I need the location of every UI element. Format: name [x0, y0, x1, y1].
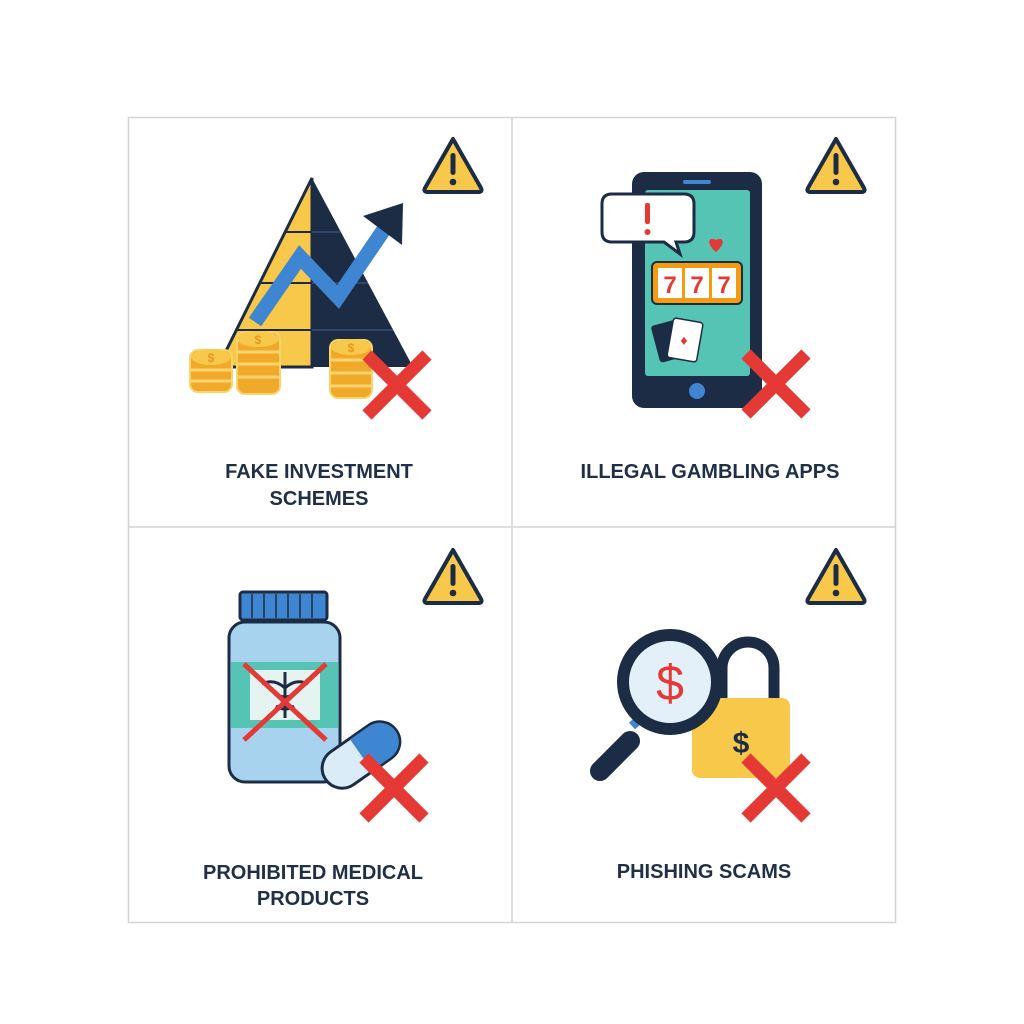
icon: coins: $: [348, 341, 355, 355]
icon: red x: [746, 354, 806, 414]
icon: padlock: $: [733, 727, 750, 760]
icon: red x: [364, 758, 424, 818]
icon: magnifier: [600, 635, 717, 771]
icon: pill: [314, 714, 408, 796]
icon: speech bubble: [602, 194, 694, 254]
icon: warning: [807, 550, 865, 603]
heading: PHISHING SCAMS: [617, 861, 791, 883]
icon: phone: 7: [717, 272, 731, 299]
icon: phone: 7: [663, 272, 677, 299]
icon: bottle: [229, 592, 340, 782]
panel: prohibited medical products: [203, 550, 482, 910]
panel: fake investment schemes: [190, 139, 482, 510]
grid frame: [128, 117, 896, 922]
panel: phishing scams: [600, 550, 865, 883]
heading: PROHIBITED MEDICAL: [203, 862, 423, 884]
heading: FAKE INVESTMENT: [225, 461, 413, 483]
heading: PRODUCTS: [257, 888, 369, 910]
icon: warning: [424, 550, 482, 603]
icon: coins: [190, 331, 372, 398]
icon: warning: [807, 139, 865, 192]
icon: red x: [367, 355, 427, 415]
icon: warning: [424, 139, 482, 192]
icon: phone: 7: [690, 272, 704, 299]
icon: phone: ♦: [680, 332, 688, 348]
icon: magnifier: $: [656, 655, 684, 711]
icon: rising arrow: [255, 203, 403, 322]
icon: coins: $: [255, 333, 262, 347]
icon: phone: [632, 172, 762, 408]
panel: illegal gambling apps: [581, 139, 865, 483]
icon: padlock: [692, 642, 790, 778]
icon: coins: $: [208, 351, 215, 365]
heading: ILLEGAL GAMBLING APPS: [581, 461, 839, 483]
heading: SCHEMES: [270, 488, 368, 510]
icon: pyramid: [218, 178, 413, 367]
icon: red x: [746, 758, 806, 818]
